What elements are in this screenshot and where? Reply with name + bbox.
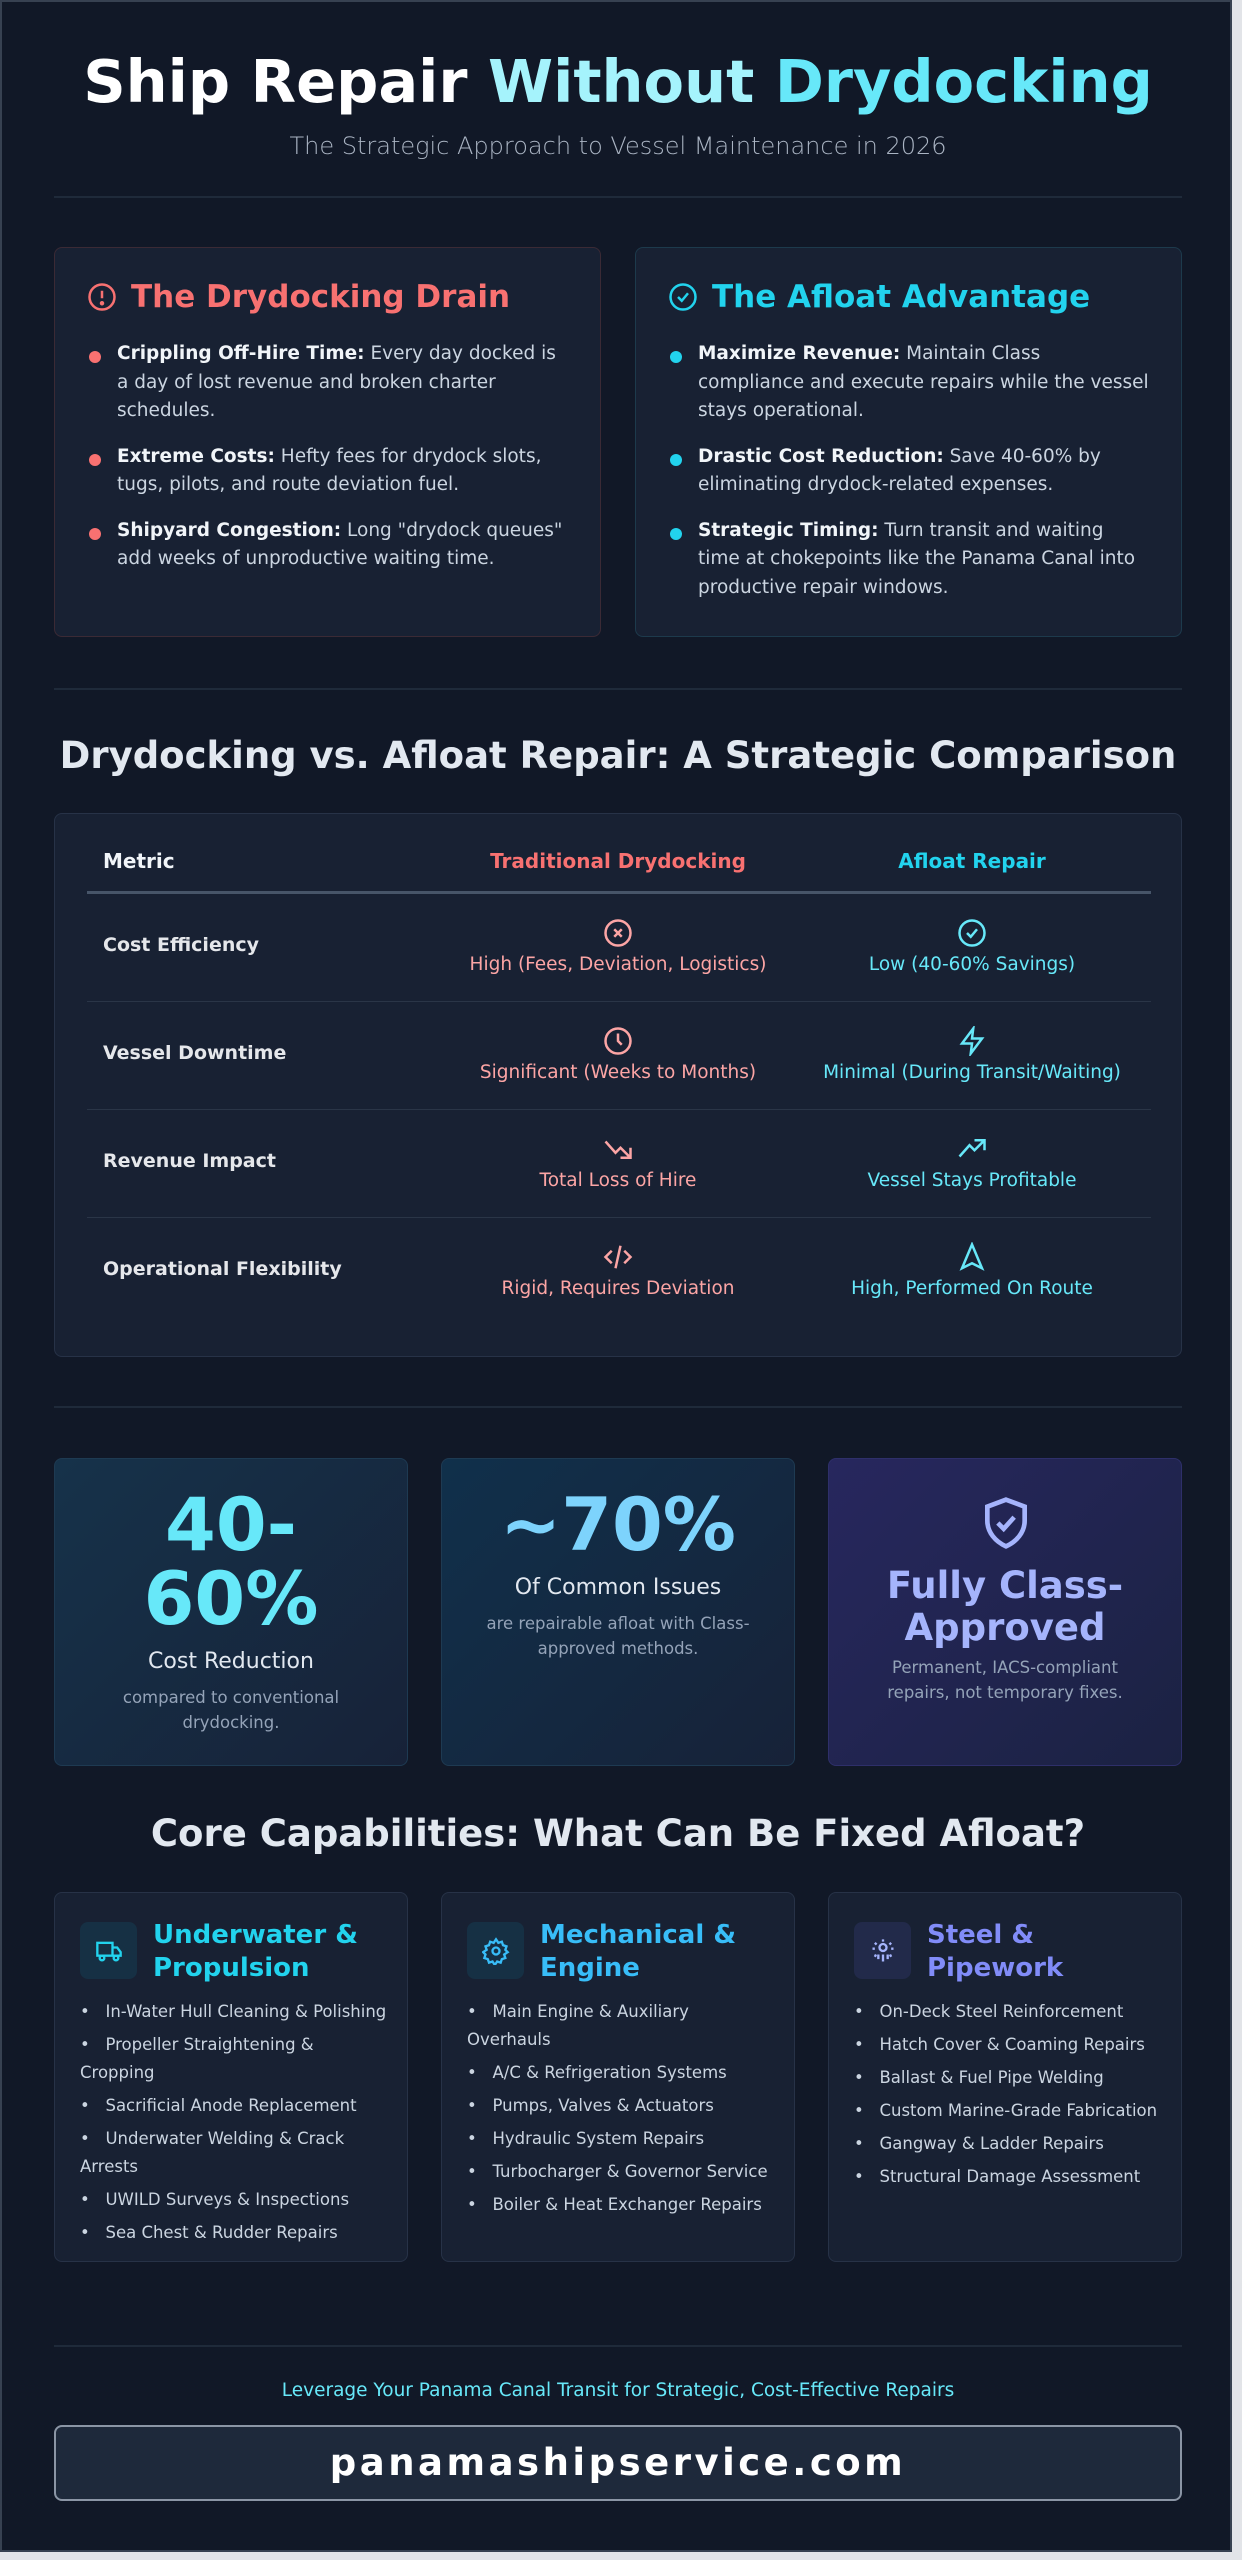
stat card: class approved: Approved (904, 1606, 1105, 1649)
card: mechanical: • A/C & Refrigeration Systems (467, 2063, 727, 2082)
card: mechanical: • Hydraulic System Repairs (467, 2129, 704, 2148)
subtitle: The Strategic Approach to Vessel Maintenance in 2026 (289, 132, 947, 160)
stat card: 40-60%: Cost Reduction (148, 1649, 314, 1674)
card: underwater: • Underwater Welding & Crack (80, 2129, 344, 2148)
stat card: class approved (828, 1458, 1182, 1766)
card: underwater: • In-Water Hull Cleaning & Polishing (80, 2002, 386, 2021)
heading: core capabilities: Core Capabilities: What Can Be Fixed Afloat? (151, 1812, 1085, 1855)
table header: Traditional Drydocking (490, 849, 746, 873)
stat card: class approved: Permanent, IACS-compliant repairs, not temporary fixes. (887, 1658, 1123, 1702)
table header: Afloat Repair (898, 849, 1046, 873)
row: vessel downtime: Minimal (During Transit/Waiting) (823, 1062, 1121, 1083)
card: mechanical: • Boiler & Heat Exchanger Repairs (467, 2195, 762, 2214)
card: underwater: • Sea Chest & Rudder Repairs (80, 2223, 338, 2242)
card: underwater: • Propeller Straightening & (80, 2035, 314, 2054)
card: mechanical: • Main Engine & Auxiliary (467, 2002, 689, 2021)
row: vessel downtime: Significant (Weeks to Months) (480, 1062, 756, 1083)
row: operational flexibility (103, 1242, 1093, 1299)
card: underwater (54, 1892, 408, 2262)
row: operational flexibility: Operational Flexibility (103, 1258, 342, 1280)
row: cost efficiency: High (Fees, Deviation, Logistics) (470, 954, 766, 975)
row: vessel downtime: Vessel Downtime (103, 1042, 286, 1064)
stat card: ~70%: Of Common Issues (515, 1575, 721, 1600)
stat card: class approved: Fully Class- (887, 1564, 1123, 1607)
stat card: ~70%: are repairable afloat with Class-approved methods. (486, 1614, 750, 1658)
card: steel: • Gangway & Ladder Repairs (854, 2134, 1104, 2153)
row: operational flexibility: High, Performed On Route (851, 1278, 1093, 1299)
card: underwater: • UWILD Surveys & Inspections (80, 2190, 349, 2209)
row: revenue impact (87, 1110, 1151, 1218)
stat card: 40-60%: compared to conventional drydocking. (123, 1688, 339, 1732)
card: underwater: • Sacrificial Anode Replacement (80, 2096, 357, 2115)
url box: panamashipservice.com (330, 2441, 906, 2484)
url box (54, 2425, 1182, 2501)
card: underwater: Underwater & (153, 1920, 358, 1950)
stat card: 40-60% (54, 1458, 408, 1766)
panel: drydocking drain (54, 247, 601, 637)
bullet list: drain (89, 343, 562, 569)
card: steel: • Hatch Cover & Coaming Repairs (854, 2035, 1145, 2054)
card: steel: • Structural Damage Assessment (854, 2167, 1140, 2186)
card: steel: • Ballast & Fuel Pipe Welding (854, 2068, 1104, 2087)
row: revenue impact: Revenue Impact (103, 1150, 276, 1172)
card: mechanical (441, 1892, 795, 2262)
card: steel: • On-Deck Steel Reinforcement (854, 2002, 1123, 2021)
bullet list: afloat: Drastic Cost Reduction: Save 40-60% by eliminating drydock-related expenses. (698, 446, 1101, 495)
card: underwater: Arrests (80, 2157, 138, 2176)
row: cost efficiency: Cost Efficiency (103, 934, 259, 956)
table header (87, 814, 1151, 894)
card: steel: Steel & (927, 1920, 1034, 1950)
icon: gear (467, 1922, 524, 1979)
row: cost efficiency: Low (40-60% Savings) (869, 954, 1075, 975)
bullet list: afloat: Strategic Timing: Turn transit and waiting time at chokepoints like the Panama Canal into productive repair windows. (698, 520, 1135, 598)
row: cost efficiency (87, 894, 1151, 1002)
row: revenue impact: Vessel Stays Profitable (868, 1170, 1076, 1191)
row: operational flexibility: Rigid, Requires Deviation (502, 1278, 734, 1299)
bullet list: drain: Crippling Off-Hire Time: Every day docked is a day of lost revenue and broken charter schedules. (117, 343, 556, 421)
card: steel (828, 1892, 1182, 2262)
heading: drain: The Drydocking Drain (131, 279, 510, 315)
icon: vehicle (80, 1922, 137, 1979)
table header: Metric (103, 849, 175, 873)
stat card: ~70% (441, 1458, 795, 1766)
stat card: 40-60%: 60% (144, 1557, 318, 1642)
card: steel: Pipework (927, 1953, 1063, 1983)
card: underwater: Propulsion (153, 1953, 310, 1983)
stat card: ~70%: ~70% (500, 1483, 736, 1568)
card: steel: • Custom Marine-Grade Fabrication (854, 2101, 1157, 2120)
bullet list: afloat: Maximize Revenue: Maintain Class compliance and execute repairs while the vessel stays operational. (698, 343, 1149, 421)
card: mechanical: • Turbocharger & Governor Service (467, 2162, 768, 2181)
stat card: 40-60%: 40- (165, 1483, 297, 1568)
bullet list: afloat (670, 343, 1149, 598)
row: revenue impact: Total Loss of Hire (540, 1170, 696, 1191)
panel: afloat advantage (635, 247, 1182, 637)
bullet list: drain: Extreme Costs: Hefty fees for drydock slots, tugs, pilots, and route deviation fuel. (117, 446, 541, 495)
title: Ship Repair Without Drydocking (83, 47, 1153, 116)
comparison table (54, 813, 1182, 1357)
bullet list: drain: Shipyard Congestion: Long "drydock queues" add weeks of unproductive waiting time. (117, 520, 562, 569)
card: mechanical: Mechanical & (540, 1920, 736, 1950)
card: mechanical: • Pumps, Valves & Actuators (467, 2096, 714, 2115)
row: vessel downtime (87, 1002, 1151, 1110)
card: mechanical: Overhauls (467, 2030, 551, 2049)
card: mechanical: Engine (540, 1953, 640, 1983)
icon: shield (985, 1497, 1027, 1549)
heading: comparison: Drydocking vs. Afloat Repair: A Strategic Comparison (60, 734, 1176, 777)
heading: afloat: The Afloat Advantage (712, 279, 1090, 315)
footer tagline: Leverage Your Panama Canal Transit for Strategic, Cost-Effective Repairs (282, 2380, 954, 2401)
icon: spark (854, 1922, 911, 1979)
card: underwater: Cropping (80, 2063, 154, 2082)
